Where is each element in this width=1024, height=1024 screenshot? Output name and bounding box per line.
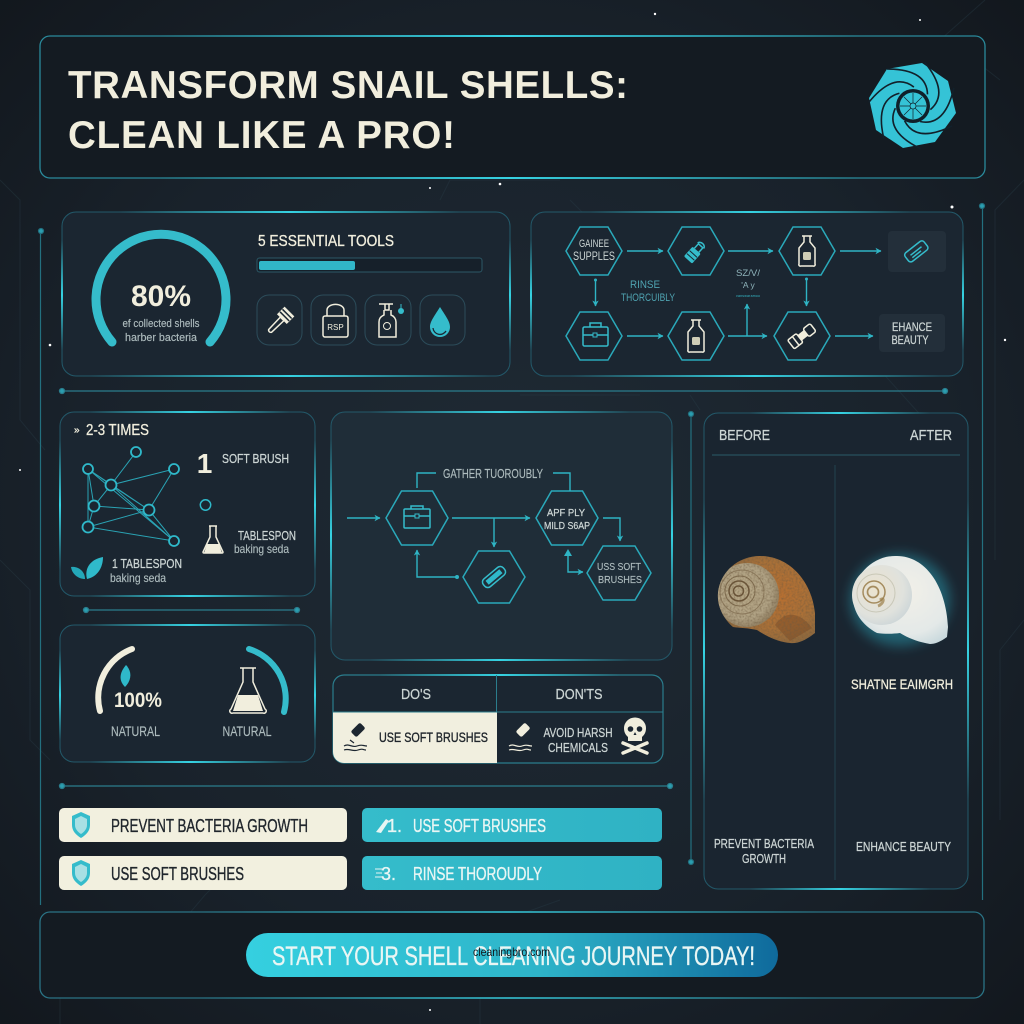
hexagon: gather supplies <box>566 227 622 275</box>
icon: brush <box>257 295 302 345</box>
title: TRANSFORM SNAIL SHELLS: <box>68 64 628 107</box>
dont: avoid harsh chemicals: CHEMICALS <box>548 740 608 755</box>
do: use soft brushes <box>344 723 488 751</box>
title: CLEAN LIKE A PRO! <box>68 114 455 157</box>
gauge: 80 percent <box>96 234 226 344</box>
hexagon: use soft brushes: BRUSHES <box>598 574 642 586</box>
button: start your journey <box>246 933 778 977</box>
hexagon: gather supplies: GAINEE <box>579 238 609 250</box>
caption: enhance beauty: ENHANCE BEAUTY <box>856 839 951 854</box>
icon: soap pack: RSP <box>327 323 344 332</box>
hexagon: apply mild soap: APF PLY <box>547 507 585 519</box>
output tag: clean brush <box>888 231 946 272</box>
button: start your journey: START YOUR SHELL CLEANING JOURNEY TODAY! <box>272 941 755 971</box>
watermark: domain: cleaningbro.com <box>473 945 550 959</box>
panel: before and after <box>703 412 969 890</box>
card: step 3 rinse thoroughly: RINSE THOROUDLY <box>413 863 542 884</box>
card: use soft brushes <box>59 856 347 890</box>
caption: after shell: SHATNE EAIMGRH <box>851 676 953 692</box>
card: step 1 use soft brushes: 1. <box>387 816 402 836</box>
label: garbled note: 'A y <box>741 280 755 290</box>
heading: 5 essential tools: 5 ESSENTIAL TOOLS <box>258 233 394 250</box>
gauge: 100 percent natural: NATURAL <box>111 723 160 739</box>
hexagon: bottle <box>779 227 835 275</box>
heading: after: AFTER <box>910 427 952 444</box>
panel: natural gauges <box>59 624 316 763</box>
icon: soap pack <box>311 295 356 345</box>
card: step 3 rinse thoroughly <box>362 856 662 890</box>
stat: one soft brush: SOFT BRUSH <box>222 451 289 466</box>
gauge: 80 percent: harber bacteria <box>125 332 198 344</box>
do: use soft brushes: USE SOFT BRUSHES <box>379 729 488 745</box>
panel: call to action <box>40 911 984 999</box>
card: prevent bacteria growth: PREVENT BACTERIA GROWTH <box>111 815 308 836</box>
card: step 1 use soft brushes: USE SOFT BRUSHES <box>413 815 546 836</box>
label: garbled note: SZ/V/ <box>736 268 760 279</box>
stat: one soft brush: 1 <box>197 448 212 479</box>
gauge: flask natural: NATURAL <box>222 723 272 739</box>
hexagon: brush head <box>463 551 525 603</box>
card: use soft brushes: USE SOFT BRUSHES <box>111 863 244 884</box>
panel: central process map <box>330 411 673 661</box>
gauge: 80 percent: ef collected shells <box>122 318 200 330</box>
progress bar <box>257 258 482 272</box>
panel: dos and donts table <box>333 674 663 763</box>
label: garbled note <box>736 268 760 298</box>
icon: leaves with tablespoon label <box>71 556 182 585</box>
dont: avoid harsh chemicals <box>509 723 612 755</box>
icon: water drop <box>420 295 465 345</box>
hexagon: supplies case <box>566 312 622 360</box>
heading: before: BEFORE <box>719 427 770 444</box>
hexagon: use soft brushes <box>587 546 651 600</box>
card: step 1 use soft brushes <box>362 808 662 842</box>
card: prevent bacteria growth <box>59 808 347 842</box>
gauge: 100 percent natural: 100% <box>114 689 162 712</box>
divider: lower <box>60 784 672 788</box>
label: gather thoroughly: GATHER TUOROUBLY <box>443 467 543 481</box>
arrows: central flow <box>347 473 620 579</box>
heading: do's: DO'S <box>401 686 431 703</box>
image: dirty brown snail shell <box>715 554 818 646</box>
heading: 2-3 times: 2-3 TIMES <box>86 422 149 439</box>
output tag: enhance beauty <box>879 314 945 352</box>
hexagon: brush <box>668 227 724 275</box>
heading: 2-3 times: » <box>74 425 80 436</box>
icon: flask with tablespoon label: TABLESPON <box>238 528 296 543</box>
stat: one soft brush <box>197 448 289 479</box>
divider: left column <box>84 608 300 612</box>
panel: quantities and network <box>59 411 316 597</box>
caption: prevent bacteria growth <box>714 836 814 866</box>
icon: leaves with tablespoon label: 1 TABLESPON <box>112 556 182 571</box>
heading: don'ts: DON'TS <box>556 686 602 703</box>
icon: leaves with tablespoon label: baking seda <box>110 571 166 585</box>
network graph <box>82 447 179 546</box>
output tag: enhance beauty: EHANCE <box>892 320 932 334</box>
hexagon: apply mild soap: MILD S6AP <box>544 520 590 532</box>
gauge: flask natural <box>222 649 286 739</box>
icon: flask with tablespoon label: baking seda <box>234 542 289 556</box>
label: rinse thoroughly: RINSE <box>630 279 660 291</box>
cell: do highlight <box>333 712 497 763</box>
label: rinse thoroughly: THORCUIBLY <box>621 292 676 304</box>
gauge: 80 percent: 80% <box>131 280 191 313</box>
hexagon: gather supplies: SUPPLES <box>573 251 615 263</box>
icon: flask with tablespoon label <box>203 526 296 556</box>
caption: prevent bacteria growth: PREVENT BACTERIA <box>714 836 814 851</box>
image: clean white snail shell <box>850 554 950 646</box>
panel: statistic and tools <box>61 211 511 377</box>
node marker <box>200 500 211 510</box>
panel: header banner <box>40 35 985 179</box>
label: rinse thoroughly <box>621 279 676 304</box>
label: garbled note: vanswaramoo <box>736 294 760 298</box>
hexagon: soft brush <box>774 312 830 360</box>
hexagon: bottle 2 <box>668 312 724 360</box>
hexagon: apply mild soap <box>536 491 598 545</box>
hexagon: use soft brushes: USS SOFT <box>597 561 641 573</box>
divider: upper <box>60 388 948 394</box>
caption: prevent bacteria growth: GROWTH <box>742 851 786 866</box>
icon: aperture shell logo <box>869 62 956 149</box>
panel: process flow top <box>530 211 964 377</box>
card: step 3 rinse thoroughly: 3. <box>381 864 396 884</box>
gauge: 100 percent natural <box>98 649 162 739</box>
arrows: top flow <box>594 251 881 336</box>
dont: avoid harsh chemicals: AVOID HARSH <box>544 725 612 740</box>
icon: skull and crossbones <box>623 718 647 753</box>
hexagon: case <box>386 491 448 545</box>
output tag: enhance beauty: BEAUTY <box>892 333 928 347</box>
icon: spray bottle <box>365 295 411 345</box>
